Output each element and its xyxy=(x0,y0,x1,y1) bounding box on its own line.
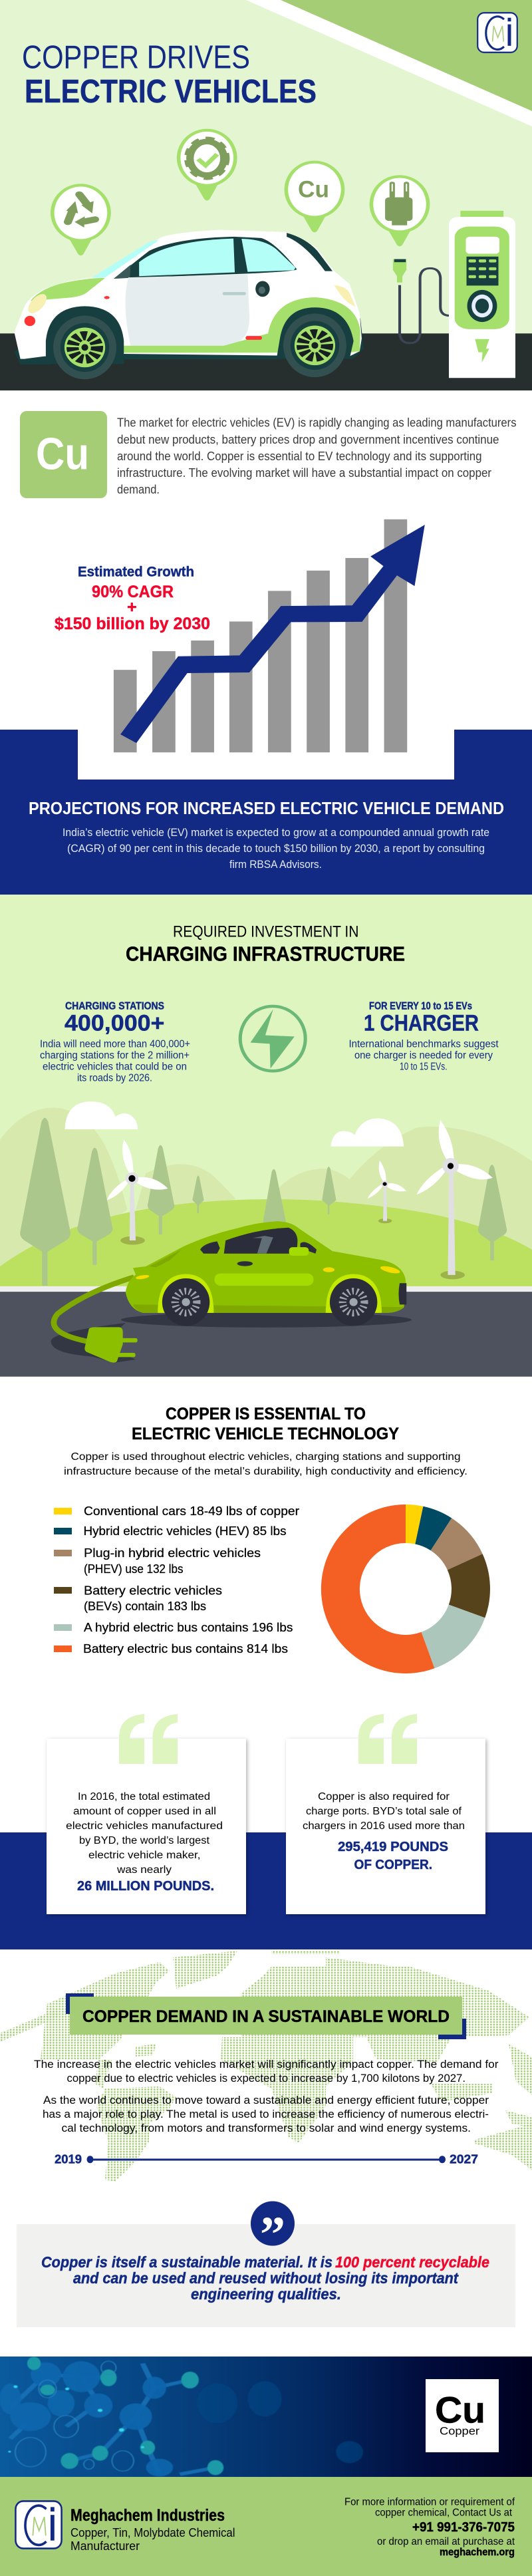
logo xyxy=(477,13,517,53)
pin: recycle xyxy=(51,184,111,255)
copper element card: Cu xyxy=(435,2389,485,2431)
stat: charging stations: India will need more than 400,000+ xyxy=(40,1038,190,1050)
back hills xyxy=(0,1107,532,1286)
landscape illustration xyxy=(0,1101,532,1377)
stat: charging stations: CHARGING STATIONS xyxy=(65,1000,164,1012)
header section xyxy=(0,0,532,390)
section heading xyxy=(132,1405,399,1443)
card text: chargers in 2016 used more than xyxy=(303,1820,465,1832)
stat: charging stations: electric vehicles that could be on xyxy=(43,1061,187,1072)
legend item: PHEV: (PHEV) use 132 lbs xyxy=(84,1562,184,1576)
legend item: BEV xyxy=(54,1584,222,1613)
section paragraphs: copper due to electric vehicles is expected to increase by 1,700 kilotons by 2027. xyxy=(66,2072,466,2084)
timeline 2019 to 2027 xyxy=(55,2153,478,2166)
section paragraphs: As the world continues to move toward a sustainable and energy efficient future, copper xyxy=(43,2094,489,2106)
card text: amount of copper used in all xyxy=(73,1806,216,1817)
section title box xyxy=(66,1993,466,2039)
legend item: HEV: Hybrid electric vehicles (HEV) 85 lbs xyxy=(84,1524,286,1538)
projections paragraph: (CAGR) of 90 per cent in this decade to touch $150 billion by 2030, a report by consulting xyxy=(67,843,485,855)
intro: copper tile and paragraph xyxy=(20,411,516,498)
legend item: hybrid bus: A hybrid electric bus contains 196 lbs xyxy=(84,1621,293,1634)
section paragraph xyxy=(64,1451,467,1477)
intro paragraph: demand. xyxy=(117,483,160,496)
corner banner xyxy=(246,0,532,126)
card: BYD copper total xyxy=(47,1714,246,1914)
donut chart xyxy=(321,1504,490,1673)
section heading: REQUIRED INVESTMENT IN xyxy=(173,923,359,941)
stat: one charger: 1 CHARGER xyxy=(364,1011,479,1036)
title: COPPER DRIVES xyxy=(22,40,250,76)
stat: charging stations: charging stations for the 2 million+ xyxy=(40,1050,190,1061)
card: charge ports: 295,419 POUNDS xyxy=(338,1840,448,1854)
contact details: +91 991-376-7075 xyxy=(412,2520,515,2535)
car wheels xyxy=(162,1278,377,1326)
stat: charging stations: 400,000+ xyxy=(65,1011,165,1036)
copper element card: Copper xyxy=(440,2425,479,2438)
card text: was nearly xyxy=(116,1864,172,1876)
growth callout: Estimated Growth xyxy=(78,565,194,580)
legend item: PHEV xyxy=(54,1546,261,1576)
legend xyxy=(54,1504,299,1655)
section paragraphs: has a major role to play. The metal is used to increase the efficiency of numerous electri- xyxy=(43,2108,489,2120)
contact details: or drop an email at purchase at xyxy=(377,2536,515,2547)
road xyxy=(0,1286,532,1377)
contact details: meghachem.org xyxy=(440,2547,515,2558)
charging infrastructure section xyxy=(0,895,532,1377)
navy band xyxy=(0,1832,532,1949)
footer logo xyxy=(15,2501,62,2549)
bar chart with rising arrow xyxy=(114,519,425,752)
growth callout: $150 billion by 2030 xyxy=(55,615,210,633)
quote text xyxy=(41,2253,489,2303)
growth callout: 90% CAGR xyxy=(92,583,174,601)
card text xyxy=(66,1791,223,1876)
intro paragraph: debut new products, battery prices drop and government incentives continue xyxy=(117,433,499,446)
icon: quote badge: ” xyxy=(260,2207,285,2263)
projections paragraph: firm RBSA Advisors. xyxy=(229,859,322,871)
company name: Copper, Tin, Molybdate Chemical xyxy=(70,2526,235,2539)
dotted world map xyxy=(0,1951,532,2182)
title xyxy=(22,40,317,110)
section paragraphs: cal technology, from motors and transformers to solar and wind energy systems. xyxy=(61,2122,471,2134)
section paragraphs xyxy=(34,2058,499,2134)
section paragraph: Copper is used throughout electric vehicles, charging stations and supporting xyxy=(70,1451,460,1463)
road xyxy=(0,333,532,390)
copper element card xyxy=(426,2379,499,2452)
copper usage section xyxy=(0,1405,532,1949)
quote text: Copper is itself a sustainable material. It is xyxy=(41,2253,332,2271)
pin: gear with check xyxy=(177,129,237,201)
molecule banner xyxy=(0,2357,532,2477)
clouds xyxy=(65,1101,404,1147)
legend item: conventional cars: Conventional cars 18-49 lbs of copper xyxy=(84,1504,299,1518)
green electric car with plug xyxy=(54,1221,406,1363)
plug xyxy=(84,1327,138,1363)
section paragraph: infrastructure because of the metal’s durability, high conductivity and efficiency. xyxy=(64,1466,467,1477)
stat: one charger: FOR EVERY 10 to 15 EVs xyxy=(369,1000,472,1012)
quote panel xyxy=(17,2202,515,2327)
navy backing with cutout xyxy=(0,730,532,895)
projections paragraph: India’s electric vehicle (EV) market is expected to grow at a compounded annual growth rate xyxy=(63,827,489,839)
timeline 2019 to 2027: 2019 xyxy=(55,2153,82,2166)
company name: Manufacturer xyxy=(70,2539,140,2553)
intro paragraph: infrastructure. The evolving market will have a substantial impact on copper xyxy=(117,466,491,480)
legend item: BEV: (BEVs) contain 183 lbs xyxy=(84,1600,206,1613)
intro paragraph: around the world. Copper is essential to EV technology and its supporting xyxy=(117,450,481,463)
stat: charging stations xyxy=(40,1000,190,1083)
pin: copper xyxy=(285,160,344,232)
car xyxy=(14,230,364,364)
stat: one charger: International benchmarks suggest xyxy=(348,1038,499,1050)
card text xyxy=(303,1791,465,1832)
contact details xyxy=(344,2497,515,2558)
stat: one charger: 10 to 15 EVs. xyxy=(400,1061,447,1072)
legend item: battery bus: Battery electric bus contains 814 lbs xyxy=(83,1642,288,1655)
front hill xyxy=(0,1199,532,1288)
pin label: Cu: Cu xyxy=(298,177,329,203)
section heading: COPPER IS ESSENTIAL TO xyxy=(166,1405,366,1423)
intro paragraph xyxy=(117,416,516,496)
front wheel xyxy=(53,316,116,379)
charging station xyxy=(449,211,515,378)
quote text: engineering qualities. xyxy=(191,2285,341,2303)
icon: quote mark xyxy=(119,1714,178,1764)
projections panel xyxy=(0,519,532,895)
card text: electric vehicle maker, xyxy=(88,1850,201,1861)
trees xyxy=(20,1118,507,1286)
card text: charge ports. BYD’s total sale of xyxy=(306,1806,462,1817)
stat: one charger xyxy=(348,1000,499,1072)
molecule illustration xyxy=(0,2357,363,2476)
footer xyxy=(0,2477,532,2576)
growth callout xyxy=(55,565,210,633)
section heading: ELECTRIC VEHICLE TECHNOLOGY xyxy=(132,1425,399,1443)
card: charge ports xyxy=(286,1714,485,1914)
section title box: COPPER DEMAND IN A SUSTAINABLE WORLD xyxy=(82,2007,450,2026)
quote text: and can be used and reused without losing its important xyxy=(73,2269,459,2287)
sustainable world section xyxy=(0,1951,532,2327)
card text: In 2016, the total estimated xyxy=(78,1791,210,1802)
growth callout: + xyxy=(127,598,137,617)
card text: electric vehicles manufactured xyxy=(66,1820,223,1832)
card: charge ports: OF COPPER. xyxy=(354,1858,432,1872)
section heading xyxy=(126,923,405,966)
contact details: For more information or requirement of xyxy=(344,2497,515,2508)
charger cable xyxy=(393,259,450,343)
stat: charging stations: its roads by 2026. xyxy=(77,1072,152,1083)
pin: plug xyxy=(370,175,430,246)
faint distant molecule xyxy=(197,2381,363,2463)
wind turbine right xyxy=(417,1120,493,1279)
icon: quote badge xyxy=(251,2202,295,2263)
company name xyxy=(70,2506,235,2553)
icon: Cu tile: Cu xyxy=(36,429,89,480)
icon: quote mark xyxy=(358,1714,417,1764)
card text: Copper is also required for xyxy=(318,1791,450,1802)
stat: one charger: one charger is needed for every xyxy=(354,1050,493,1061)
card: BYD copper total: 26 MILLION POUNDS. xyxy=(77,1879,214,1894)
rear wheel xyxy=(283,313,346,377)
icon: Cu tile xyxy=(20,411,107,498)
company name: Meghachem Industries xyxy=(70,2506,225,2525)
wind turbine small xyxy=(368,1161,406,1223)
illustration: electric car, pins and charger xyxy=(0,129,532,390)
timeline 2019 to 2027: 2027 xyxy=(450,2153,478,2166)
wind turbine left xyxy=(107,1140,168,1244)
legend item: PHEV: Plug-in hybrid electric vehicles xyxy=(84,1546,261,1560)
icon: lightning bolt xyxy=(240,1006,305,1071)
title: ELECTRIC VEHICLES xyxy=(25,74,317,110)
quote text: 100 percent recyclable xyxy=(335,2253,489,2271)
section paragraphs: The increase in the electric vehicles market will significantly impact copper. The demand for xyxy=(34,2058,499,2071)
section heading: CHARGING INFRASTRUCTURE xyxy=(126,942,405,966)
arrow xyxy=(120,525,425,743)
projections paragraph xyxy=(63,827,489,871)
contact details: copper chemical, Contact Us at xyxy=(375,2507,513,2519)
legend item: BEV: Battery electric vehicles xyxy=(84,1584,222,1597)
card text: by BYD, the world’s largest xyxy=(79,1835,210,1846)
